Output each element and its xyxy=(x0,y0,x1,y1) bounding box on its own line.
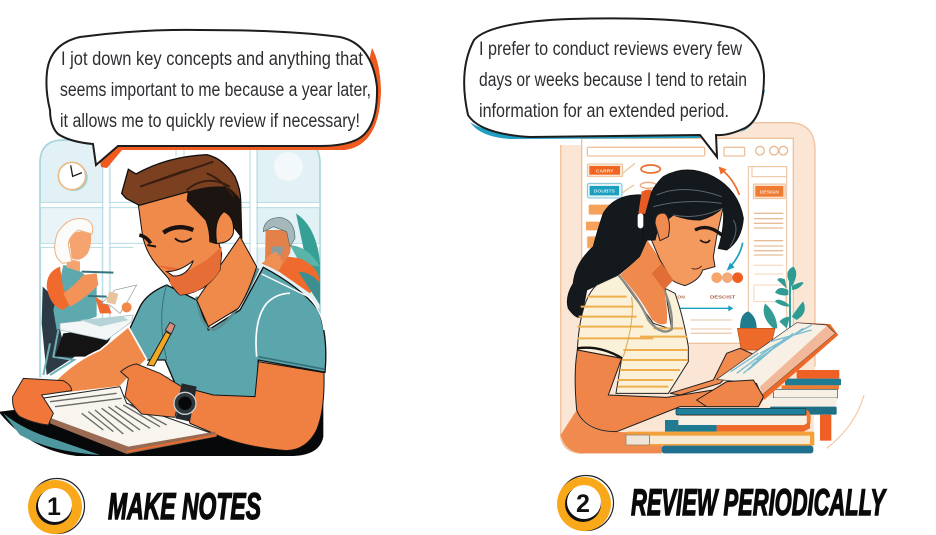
upper hand on book xyxy=(670,348,755,395)
neck xyxy=(197,237,257,327)
screen labels: ON xyxy=(677,295,685,301)
quote text xyxy=(60,49,371,132)
neck and head xyxy=(620,193,723,324)
illustration: woman reviewing xyxy=(561,123,864,453)
timeline arrow and text lines xyxy=(680,305,733,333)
icon: wristwatch xyxy=(174,383,197,422)
quote text: I jot down key concepts and anything that xyxy=(61,49,364,70)
quote text xyxy=(479,39,747,122)
bubble shadow xyxy=(470,90,765,139)
interface buttons xyxy=(586,163,660,248)
potted plant xyxy=(737,267,805,350)
writing hand xyxy=(121,364,182,417)
sidebar panel: DESIGN xyxy=(760,189,779,195)
quote text: days or weeks because I tend to retain xyxy=(479,70,747,91)
striped skirt xyxy=(561,410,663,453)
hair tie xyxy=(638,189,652,214)
table surface and dark shadow xyxy=(0,397,323,456)
icon: pencil xyxy=(147,322,175,366)
book stack xyxy=(626,370,841,453)
step 2 badge xyxy=(557,476,614,531)
screen labels xyxy=(677,295,735,301)
ear xyxy=(655,213,669,241)
background: application screen xyxy=(561,123,864,453)
step 1 badge: 1 xyxy=(47,493,61,521)
interface buttons: DOUBTS xyxy=(594,189,616,195)
step 1 heading: MAKE NOTES xyxy=(108,486,261,527)
speech bubble: review periodically xyxy=(464,18,765,157)
sidebar panel xyxy=(748,167,787,347)
lower hand xyxy=(697,380,763,407)
background woman writing xyxy=(42,219,137,375)
head xyxy=(122,155,242,295)
background man thinking and plant xyxy=(262,213,320,305)
screen labels: DESCIST xyxy=(710,295,735,301)
right arm xyxy=(182,362,324,451)
quote text: I prefer to conduct reviews every few xyxy=(479,39,742,60)
interface buttons: CARRY xyxy=(596,168,614,174)
hair highlights xyxy=(653,190,736,247)
hair top xyxy=(643,170,743,250)
left hand xyxy=(13,378,72,425)
progress dots xyxy=(711,272,743,283)
step 1 badge xyxy=(28,478,84,534)
shirt xyxy=(128,267,326,397)
bubble shadow xyxy=(100,48,381,168)
striped shirt xyxy=(577,275,688,393)
bubble outline xyxy=(46,30,377,165)
step 2 badge: 2 xyxy=(576,490,590,518)
ponytail xyxy=(567,195,647,317)
quote text: it allows me to quickly review if necessary! xyxy=(60,111,360,132)
bubble outline xyxy=(464,18,764,157)
hair tie white band xyxy=(638,213,643,228)
open book held xyxy=(716,323,838,400)
speech bubble: make notes xyxy=(46,30,381,168)
arm xyxy=(575,350,764,432)
quote text: seems important to me because a year later, xyxy=(60,80,371,101)
quote text: information for an extended period. xyxy=(479,101,729,122)
icon: pale wall clock xyxy=(274,152,303,181)
icon: wall clock xyxy=(58,162,88,191)
left forearm xyxy=(57,327,147,393)
background: window room xyxy=(40,140,320,377)
cycle arrows xyxy=(719,167,743,271)
illustration: man making notes xyxy=(0,140,326,456)
open book xyxy=(42,387,217,454)
